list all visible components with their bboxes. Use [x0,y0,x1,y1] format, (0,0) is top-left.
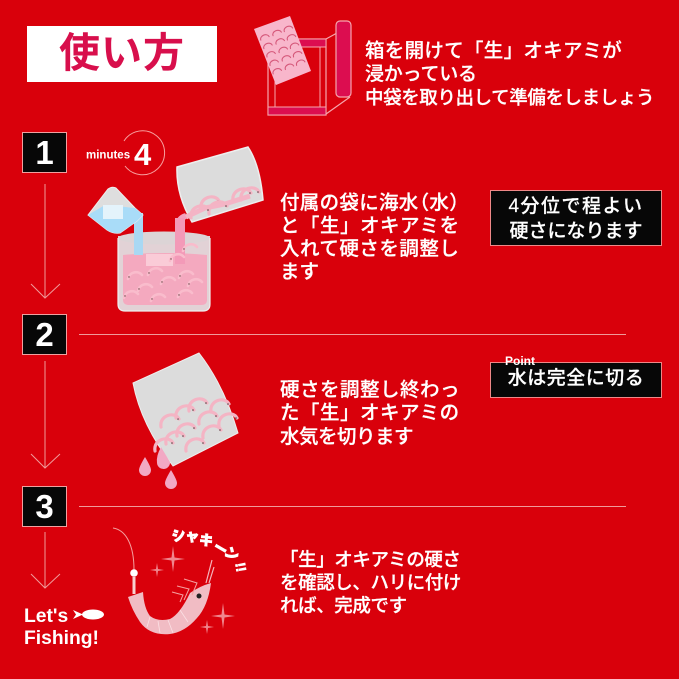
intro text [365,40,654,108]
sound effect text: シ [170,526,188,545]
point label: Point [505,354,535,368]
step 1 callout [490,190,662,246]
intro text: 箱を開けて「生」オキアミが [365,40,622,62]
icon: minutes 4 timer: minutes [86,150,130,162]
step 2 text: 水気を切ります [280,426,413,448]
step 2 callout: 水は完全に切る [508,368,644,389]
step 3 number [22,486,67,527]
step 1 text [280,192,469,283]
icon: beaker with pouring bags [88,147,263,311]
step 1 text: 入れて硬さを調整し [280,238,459,260]
step 2 text: 硬さを調整し終わっ [280,379,460,401]
step 2 text [280,379,460,448]
sound effect text: !! [232,561,250,573]
step 2 text: た「生」オキアミの [280,402,460,424]
step 1 number: 1 [35,134,54,171]
step 2 number [22,314,67,355]
lets fishing text: Let's [24,606,68,627]
sound effect text: ャ [185,527,200,545]
icon: opened box with inner bag [254,16,351,115]
step 1 number [22,132,67,173]
step connector lines [31,184,626,588]
step 3 text: れば、完成です [280,595,407,616]
icon: bag draining water [133,353,238,489]
icon: minutes 4 timer [86,131,165,175]
step 3 text [280,548,461,616]
step 1 callout: 硬さになります [509,221,642,242]
step 3 number: 3 [35,488,54,525]
sound effect text: ン [222,543,242,564]
intro text: 浸かっている [365,64,477,85]
title: 使い方 [59,30,185,76]
step 2 number: 2 [35,316,54,353]
title [27,26,217,82]
step 1 text: と「生」オキアミを [280,215,460,237]
step 1 text: 付属の袋に海水（水） [280,192,469,214]
intro text: 中袋を取り出して準備をしましょう [365,87,654,108]
sound effect text: キ [197,531,215,550]
step 3 text: を確認し、ハリに付け [280,572,461,593]
step 2 callout [490,362,662,398]
step 3 text: 「生」オキアミの硬さ [280,548,461,570]
step 1 text: ます [280,261,319,283]
step 1 callout: 4分位で程よい [508,196,644,217]
icon: fish [73,610,104,620]
icon: minutes 4 timer: 4 [134,137,152,172]
lets fishing text: Fishing! [24,628,99,649]
sound effect text: ー [210,538,231,559]
icon: shrimp on hook with sparkle [113,528,235,634]
sound effect text [170,526,250,573]
lets fishing text [24,606,99,649]
